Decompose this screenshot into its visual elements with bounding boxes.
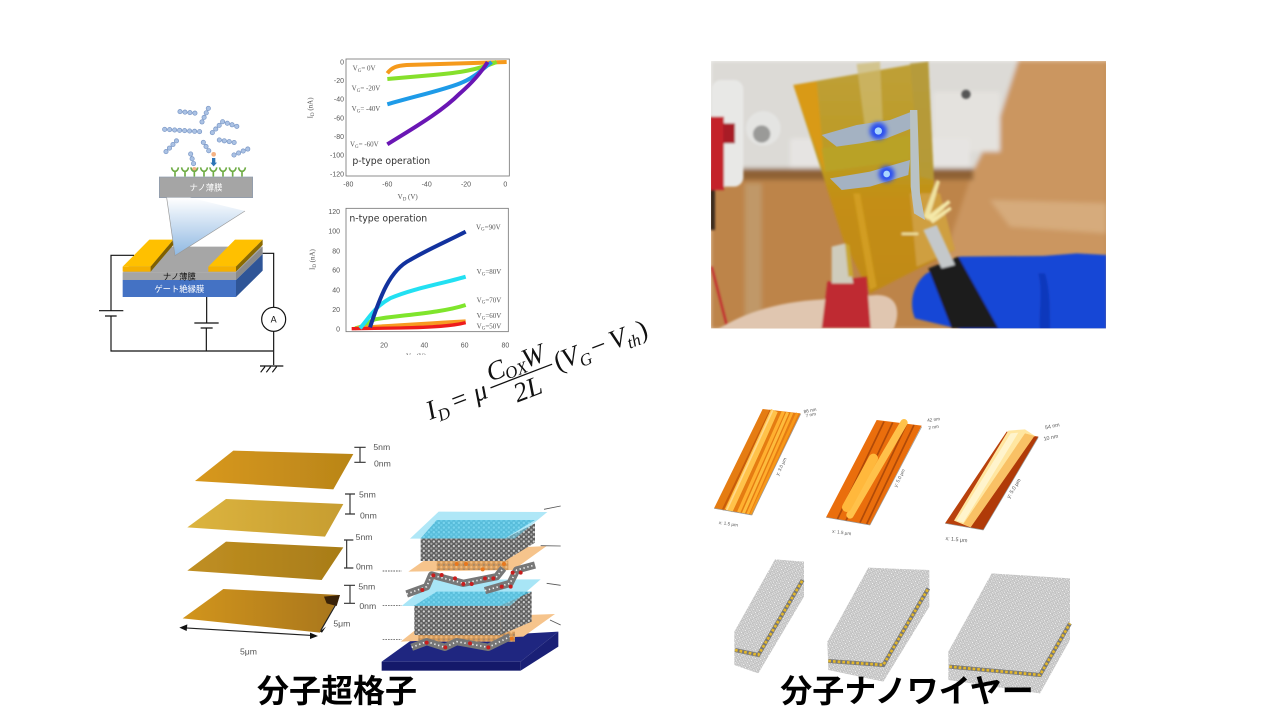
- chart: p-type operation: p-type operation: [352, 156, 430, 167]
- chart: n-type operation: V: [406, 352, 411, 360]
- chart: n-type operation: =60V: [485, 312, 501, 320]
- nano film magnified layer: [159, 177, 253, 198]
- AFM surface 1: [195, 451, 353, 489]
- AFM surface stack: 5nm: [359, 489, 376, 499]
- chart: p-type operation: V: [398, 193, 403, 201]
- chart: n-type operation: G: [482, 327, 486, 332]
- AFM nanowire image 1: y: 3.0 μm: [775, 457, 788, 476]
- chart: p-type operation: G: [358, 69, 362, 74]
- chart: n-type operation: G: [482, 316, 486, 321]
- chart: p-type operation: -20: [334, 78, 344, 85]
- bottom molecules: [412, 637, 514, 649]
- chart: p-type operation: V: [353, 65, 358, 73]
- instrument terminals: [710, 80, 971, 325]
- AFM surface stack: 0nm: [359, 601, 376, 611]
- AFM surface stack: 0nm: [356, 561, 373, 571]
- molecules in solution: [165, 108, 249, 172]
- AFM nanowire image 2: x: 1.5 μm: [832, 529, 852, 536]
- upper block: [421, 520, 535, 561]
- AFM surface 3: [187, 542, 343, 580]
- chart: n-type operation: D: [411, 357, 415, 362]
- chart: p-type operation: [307, 59, 509, 202]
- device stack: ナノ薄膜: [163, 271, 196, 281]
- chart: p-type operation: 0: [340, 59, 344, 66]
- chart: n-type operation: =80V: [485, 268, 501, 276]
- AFM nanowire image 1: x: 1.5 μm: [719, 520, 738, 528]
- chart: p-type operation: = -40V: [360, 105, 380, 113]
- nano film magnified layer: ナノ薄膜: [190, 183, 222, 193]
- AFM nanowire image 1: [714, 407, 817, 528]
- AFM nanowire image 1: 86 nm: [803, 407, 817, 414]
- chart: n-type operation: 40: [332, 287, 340, 294]
- formula: drain current: C: [482, 353, 510, 387]
- arrow: binding: [210, 158, 217, 166]
- formula: drain current: (: [549, 345, 568, 377]
- AFM nanowire image 1: 7 nm: [805, 411, 816, 418]
- AFM nanowire image 3: 54 nm: [1044, 422, 1061, 431]
- AFM nanowire image 3: 10 nm: [1043, 434, 1059, 443]
- lower orange plane: [401, 614, 555, 642]
- formula: drain current: W: [517, 337, 551, 374]
- formula: drain current: I: [420, 394, 442, 426]
- AFM nanowire image 2: 2 nm: [928, 424, 939, 430]
- photo background: bench and instrument: [710, 60, 1110, 330]
- chart: n-type operation: 60: [332, 268, 340, 275]
- chart: p-type operation: = -20V: [360, 85, 380, 93]
- AFM surface stack: 0nm: [360, 511, 377, 521]
- AFM surface stack: 5μm: [333, 619, 350, 629]
- chart: p-type operation: -120: [330, 171, 344, 178]
- chart: p-type operation: D: [311, 112, 316, 116]
- formula: drain current: V: [557, 338, 586, 374]
- chart: n-type operation: 100: [328, 229, 340, 236]
- receptors: [172, 167, 245, 177]
- AFM surface stack: 5μm: [240, 647, 257, 657]
- chart: p-type operation: V: [350, 141, 355, 149]
- chart: n-type operation: =50V: [485, 322, 501, 330]
- lower block: [414, 592, 532, 635]
- nanowire model 1: [734, 559, 804, 673]
- AFM nanowire image 2: y: 5.0 μm: [893, 468, 906, 488]
- panel: transfer curves: [307, 59, 509, 362]
- LED glows: [870, 122, 895, 182]
- metal traces: [822, 110, 925, 220]
- formula: drain current: 2L: [509, 370, 546, 408]
- AFM surface 2: [187, 499, 343, 537]
- AFM surface 4: [183, 589, 340, 633]
- chart: n-type operation: I: [309, 268, 317, 270]
- formula: drain current: =: [447, 382, 472, 416]
- chart: p-type operation: = -60V: [359, 141, 379, 149]
- chart: p-type operation: -80: [334, 134, 344, 141]
- chart: p-type operation: -20: [461, 182, 471, 189]
- chart: p-type operation: -60: [382, 182, 392, 189]
- nanowire model 3: [948, 573, 1070, 693]
- formula: drain current: −: [586, 329, 611, 363]
- scale bars: [344, 447, 366, 603]
- chart: p-type operation: V: [352, 85, 357, 93]
- lower blue plane: [402, 579, 541, 606]
- ammeter: [262, 307, 286, 331]
- chart: p-type operation: 0: [503, 182, 507, 189]
- AFM nanowire image 3: x: 1.5 μm: [945, 536, 968, 544]
- chart: p-type operation: V: [352, 105, 357, 113]
- leader lines: [541, 506, 561, 625]
- AFM surface stack: 5nm: [356, 532, 373, 542]
- chart: n-type operation: G: [482, 301, 486, 306]
- device stack: [123, 240, 263, 297]
- chart: n-type operation: (V): [415, 352, 427, 360]
- chart: p-type operation: G: [357, 109, 361, 114]
- heading: molecular nanowire: 分子ナノワイヤー: [780, 673, 1034, 709]
- chart: n-type operation: 20: [380, 342, 388, 349]
- chart: p-type operation: -40: [334, 97, 344, 104]
- formula: drain current: ): [632, 313, 652, 345]
- chart: n-type operation: 80: [501, 342, 509, 349]
- formula: drain current: μ: [467, 375, 491, 408]
- nanowire model 2: [827, 568, 929, 682]
- photo: flexible device with glowing LEDs: [710, 60, 1110, 330]
- chart: n-type operation: V: [477, 312, 482, 320]
- formula: drain current: [415, 300, 657, 440]
- formula: drain current: th: [624, 330, 643, 352]
- formula: drain current: D: [434, 403, 454, 426]
- chart: p-type operation: I: [307, 116, 315, 118]
- ammeter: A: [271, 315, 277, 325]
- chart: n-type operation: =90V: [485, 223, 501, 231]
- superlattice molecular model: [382, 506, 561, 671]
- panel: molecular superlattice: [179, 442, 561, 671]
- kapton film: [793, 62, 955, 293]
- chart: p-type operation: (nA): [307, 97, 315, 112]
- device stack: ゲート絶縁膜: [154, 284, 204, 294]
- circuit wiring: [99, 253, 286, 372]
- chart: p-type operation: G: [355, 145, 359, 150]
- chart: p-type operation: D: [403, 197, 407, 202]
- AFM nanowire image 3: [945, 422, 1061, 544]
- AFM surface stack: 5nm: [358, 581, 375, 591]
- AFM surface stack: 5nm: [373, 442, 390, 452]
- chart: n-type operation: V: [476, 223, 481, 231]
- formula: drain current: G: [577, 349, 595, 371]
- chart: p-type operation: -100: [330, 153, 344, 160]
- chart: n-type operation: 20: [332, 307, 340, 314]
- AFM surface stack: [179, 442, 391, 657]
- formula: drain current: V: [604, 320, 634, 355]
- chart: n-type operation: V: [477, 322, 482, 330]
- chart: p-type operation: -80: [343, 182, 353, 189]
- chart: n-type operation: G: [482, 272, 486, 277]
- AFM surface stack: 0nm: [374, 459, 391, 469]
- panel: molecular nanowires: [714, 407, 1070, 693]
- chart: n-type operation: 120: [328, 209, 340, 216]
- chart: n-type operation: 0: [336, 326, 340, 333]
- chart: n-type operation: n-type operation: [349, 214, 427, 225]
- chart: n-type operation: (nA): [309, 248, 317, 264]
- chart: n-type operation: 40: [420, 342, 428, 349]
- chart: p-type operation: -60: [334, 116, 344, 123]
- AFM nanowire image 2: [826, 416, 940, 536]
- upper blue plane: [410, 512, 547, 539]
- chart: p-type operation: G: [357, 89, 361, 94]
- chart: p-type operation: -40: [422, 182, 432, 189]
- chart: n-type operation: V: [477, 268, 482, 276]
- chart: n-type operation: 80: [332, 248, 340, 255]
- chart: p-type operation: = 0V: [361, 65, 376, 73]
- heading: molecular superlattice: 分子超格子: [257, 673, 417, 709]
- AFM nanowire image 3: y: 5.0 μm: [1006, 477, 1023, 500]
- middle molecules: [407, 562, 535, 594]
- chart: n-type operation: [309, 208, 509, 362]
- formula: drain current: OX: [502, 357, 531, 383]
- magnification cone: [167, 198, 245, 256]
- AFM nanowire image 2: 42 nm: [927, 416, 940, 423]
- chart: n-type operation: =70V: [485, 296, 501, 304]
- substrate: [382, 632, 558, 671]
- chart: p-type operation: (V): [406, 193, 418, 201]
- chart: n-type operation: D: [313, 264, 318, 268]
- middle orange plane: [408, 546, 547, 572]
- dimension arrows: [181, 605, 335, 636]
- chart: n-type operation: 60: [461, 342, 469, 349]
- chart: n-type operation: V: [477, 296, 482, 304]
- gloved hand, clips and fingers: [717, 225, 1107, 330]
- panel: nano film device schematic: [99, 108, 286, 372]
- chart: n-type operation: G: [481, 228, 485, 233]
